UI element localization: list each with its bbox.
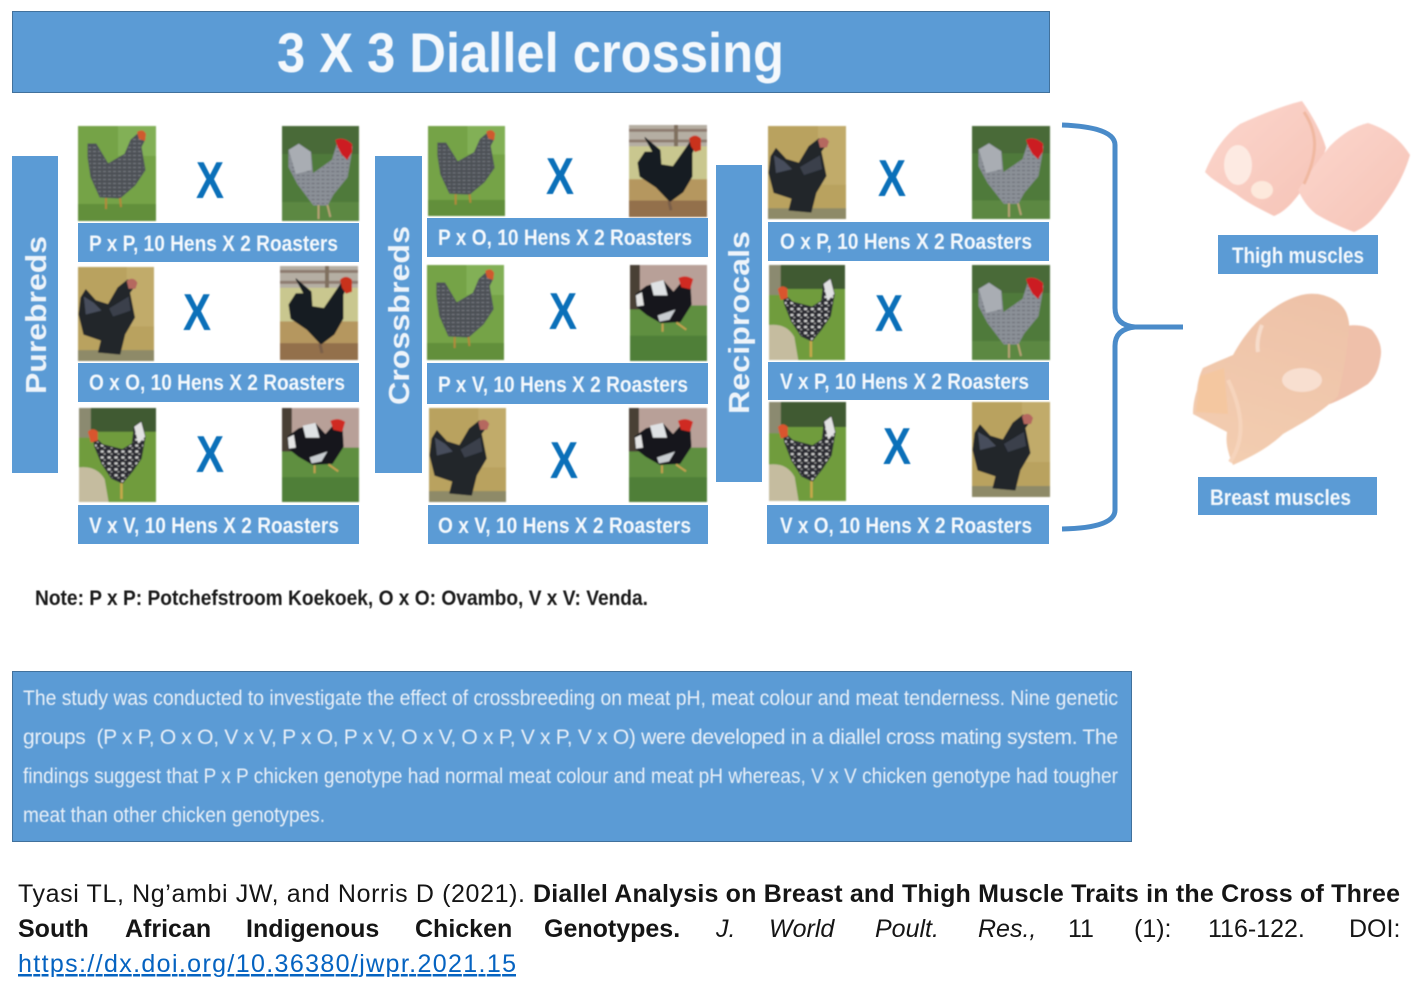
panel: study summary: meat than other chicken genotypes.: [23, 804, 325, 827]
title banner: [12, 12, 1050, 92]
icon: breast muscles meat: [1193, 294, 1381, 465]
thigh muscles label: Thigh muscles: [1232, 243, 1364, 268]
panel: study summary: [12, 672, 1132, 842]
cross: V x P: X: [875, 285, 903, 343]
panel: study summary: groups (P x P, O x O, V x V, P x O, P x V, O x V, O x P, V x P, V x O) were developed in a diallel cross mating system. The: [23, 726, 1118, 749]
citation: Poult.: [875, 915, 939, 943]
cross: P x O: [427, 125, 708, 257]
citation: Genotypes.: [544, 915, 680, 943]
cross: P x P: X: [196, 152, 224, 210]
breast muscles label: [1198, 477, 1377, 515]
citation: [18, 880, 1400, 978]
cross: O x V: O x V, 10 Hens X 2 Roasters: [438, 513, 691, 538]
cross: P x V: [427, 265, 708, 404]
citation: African: [125, 915, 211, 943]
citation: Chicken: [415, 915, 512, 943]
cross: V x V: [78, 408, 359, 544]
citation: 116-122.: [1208, 915, 1305, 943]
cross: P x V: P x V, 10 Hens X 2 Roasters: [438, 372, 688, 397]
reciprocals side label: Reciprocals: [724, 231, 756, 414]
citation: World: [769, 915, 835, 943]
thigh muscles label: [1218, 235, 1378, 274]
panel: reciprocals: [716, 126, 1050, 544]
cross: O x O: O x O, 10 Hens X 2 Roasters: [89, 370, 345, 395]
cross: V x V: X: [196, 426, 224, 484]
panel: crossbreds: [375, 125, 708, 544]
cross: O x V: [428, 408, 708, 544]
citation: Tyasi TL, Ng’ambi JW, and Norris D (2021).: [18, 880, 525, 908]
cross: V x V: V x V, 10 Hens X 2 Roasters: [89, 513, 339, 538]
cross: O x V: X: [550, 432, 578, 490]
cross: O x O: X: [183, 284, 211, 342]
citation: Indigenous: [246, 915, 379, 943]
cross: V x O: V x O, 10 Hens X 2 Roasters: [780, 513, 1032, 538]
citation: 11: [1068, 915, 1094, 943]
cross: V x O: X: [883, 418, 911, 476]
cross: V x P: [768, 265, 1050, 400]
crossbreds side label: Crossbreds: [384, 226, 416, 405]
crossbreds side label: [375, 156, 422, 473]
breast muscles label: Breast muscles: [1210, 485, 1351, 510]
purebreds side label: Purebreds: [21, 236, 53, 394]
cross: P x P: P x P, 10 Hens X 2 Roasters: [89, 231, 338, 256]
citation: (1):: [1134, 915, 1172, 943]
cross: P x V: X: [549, 283, 577, 341]
cross: O x P: O x P, 10 Hens X 2 Roasters: [780, 229, 1032, 254]
citation: Diallel Analysis on Breast and Thigh Muscle Traits in the Cross of Three: [533, 880, 1400, 908]
citation: J.: [715, 915, 735, 943]
citation: South: [18, 915, 89, 943]
cross: V x O: [767, 402, 1050, 544]
icon: thigh muscles meat: [1205, 101, 1410, 232]
panel: purebreds: [12, 126, 359, 544]
reciprocals side label: [716, 165, 762, 482]
citation: DOI:: [1349, 915, 1400, 943]
cross: V x P: V x P, 10 Hens X 2 Roasters: [780, 369, 1029, 394]
cross: O x P: [768, 126, 1050, 261]
citation: Res.,: [978, 915, 1036, 943]
cross: P x O: X: [546, 148, 574, 206]
panel: study summary: The study was conducted to investigate the effect of crossbreeding on meat pH, meat colour and meat tenderness. Nine genetic: [23, 687, 1118, 710]
right brace arrow: [1062, 125, 1183, 529]
purebreds side label: [12, 156, 58, 473]
cross: O x P: X: [878, 150, 906, 208]
panel: study summary: findings suggest that P x P chicken genotype had normal meat colour and meat pH whereas, V x V chicken genotype had tougher: [23, 765, 1118, 788]
note: Note: P x P: Potchefstroom Koekoek, O x O: Ovambo, V x V: Venda.: [35, 587, 648, 610]
citation: https://dx.doi.org/10.36380/jwpr.2021.15: [18, 950, 516, 978]
cross: P x O: P x O, 10 Hens X 2 Roasters: [438, 225, 692, 250]
cross: O x O: [78, 266, 359, 402]
title banner: 3 X 3 Diallel crossing: [277, 21, 784, 84]
cross: P x P: [78, 126, 359, 262]
